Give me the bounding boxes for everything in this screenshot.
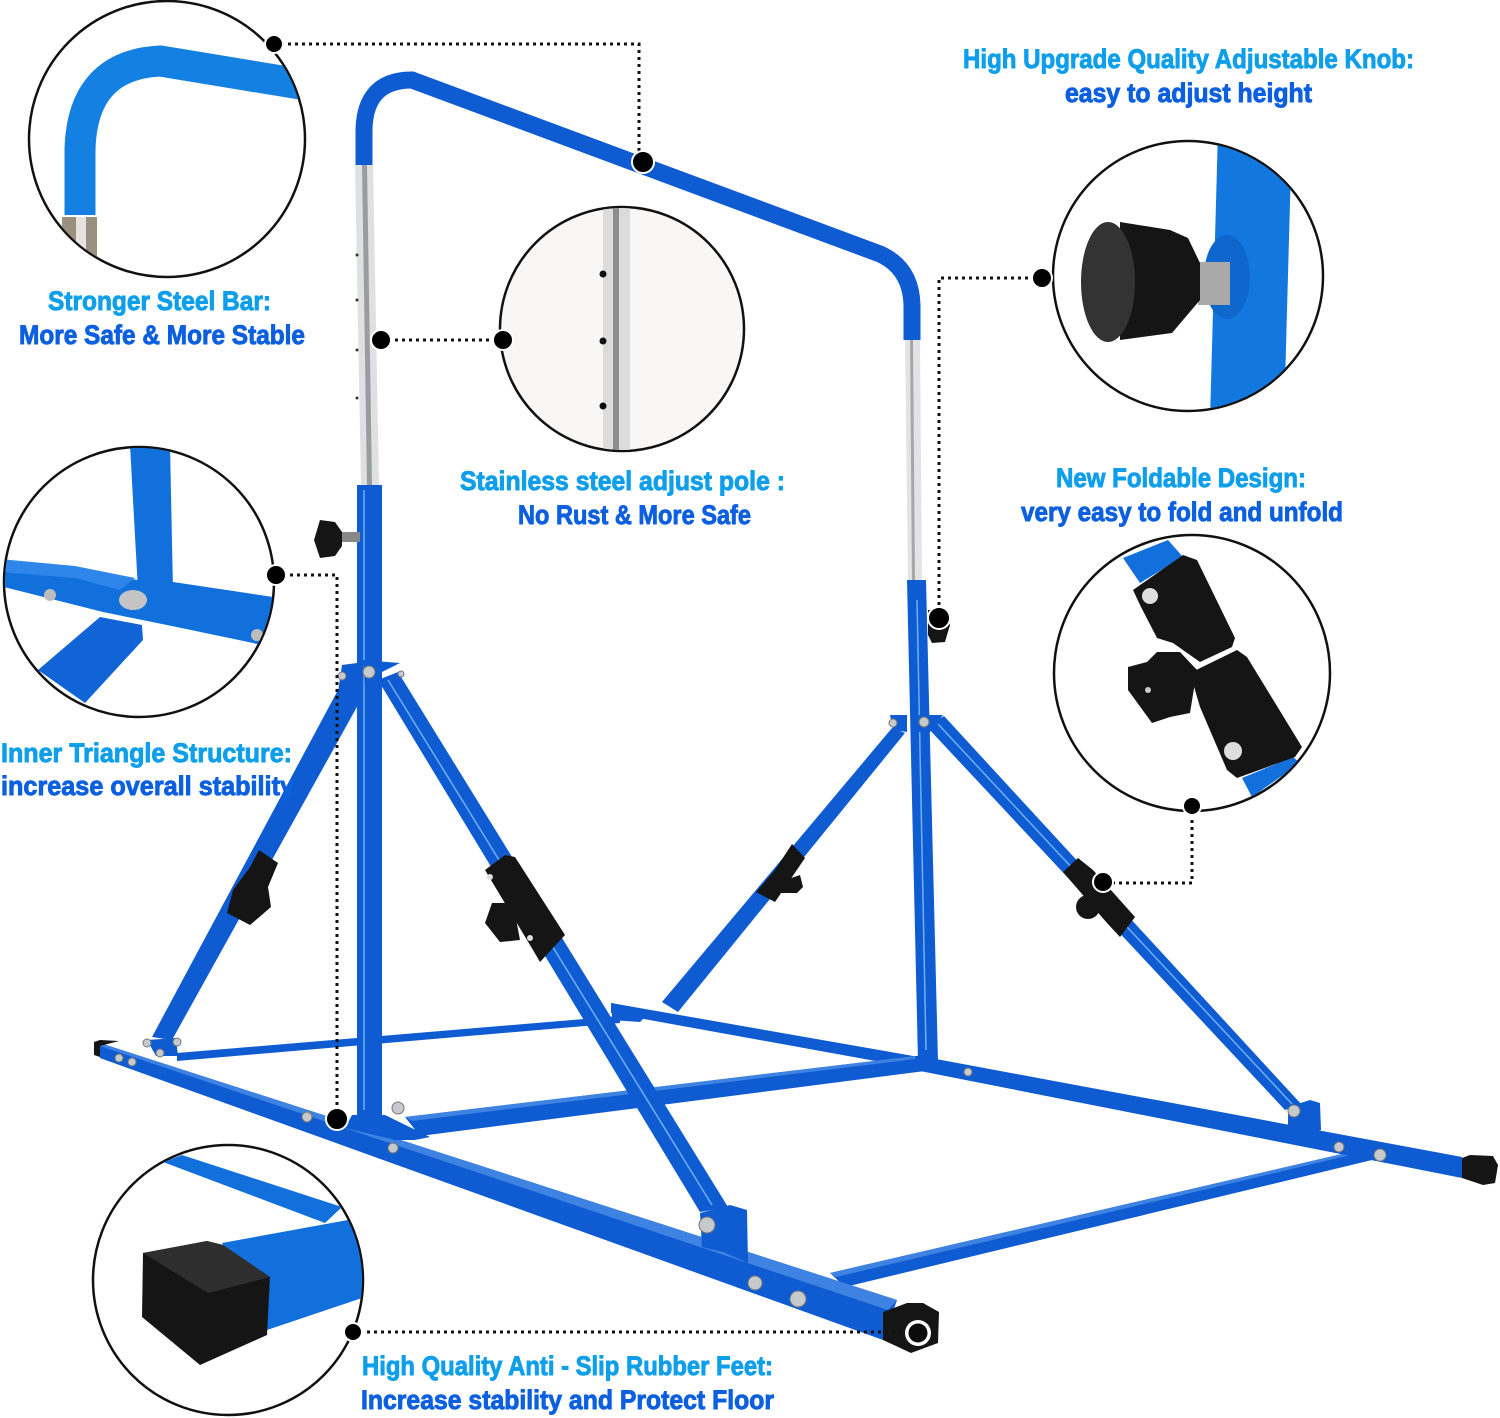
caption: triangle structure: increase overall stability: [1, 771, 294, 801]
caption: stainless pole: Stainless steel adjust pole :: [460, 466, 785, 496]
detail: stainless pole: [500, 205, 744, 455]
detail: inner triangle: [0, 445, 280, 717]
silver bolts: [115, 666, 1386, 1307]
detail: steel bar: [29, 1, 305, 277]
caption: steel bar: Stronger Steel Bar:: [48, 286, 271, 316]
caption: steel bar: [19, 286, 305, 350]
caption: triangle structure: [1, 738, 294, 801]
caption: foldable design: New Foldable Design:: [1056, 463, 1306, 493]
caption: stainless pole: [460, 466, 785, 530]
chrome adjust poles: [355, 165, 922, 582]
caption: rubber feet: [361, 1351, 774, 1415]
height adjustment knobs: [314, 520, 950, 643]
caption: adjustable knob: High Upgrade Quality Adjustable Knob:: [963, 44, 1414, 74]
caption: rubber feet: High Quality Anti - Slip Rubber Feet:: [362, 1351, 773, 1381]
caption: adjustable knob: [963, 44, 1414, 108]
floor base frame: [100, 1003, 1462, 1340]
caption: stainless pole: No Rust & More Safe: [518, 500, 751, 530]
dotted leader lines: [265, 35, 1201, 1341]
triangle support legs: [152, 672, 1302, 1212]
caption: foldable design: very easy to fold and unfold: [1021, 497, 1343, 527]
caption: adjustable knob: easy to adjust height: [1065, 78, 1312, 108]
caption: rubber feet: Increase stability and Protect Floor: [361, 1385, 774, 1415]
caption: triangle structure: Inner Triangle Structure:: [1, 738, 292, 768]
detail: rubber foot: [93, 1145, 365, 1415]
top bar: [364, 80, 912, 340]
upright posts: [357, 485, 938, 1125]
brackets on frame: [147, 660, 1321, 1263]
folding hinges: [227, 844, 1135, 962]
detail: adjustable knob: [1053, 130, 1323, 420]
detail: folding hinge: [1054, 535, 1330, 811]
rubber feet on base: [94, 1040, 1498, 1353]
caption: foldable design: [1021, 463, 1343, 527]
caption: steel bar: More Safe & More Stable: [19, 320, 305, 350]
